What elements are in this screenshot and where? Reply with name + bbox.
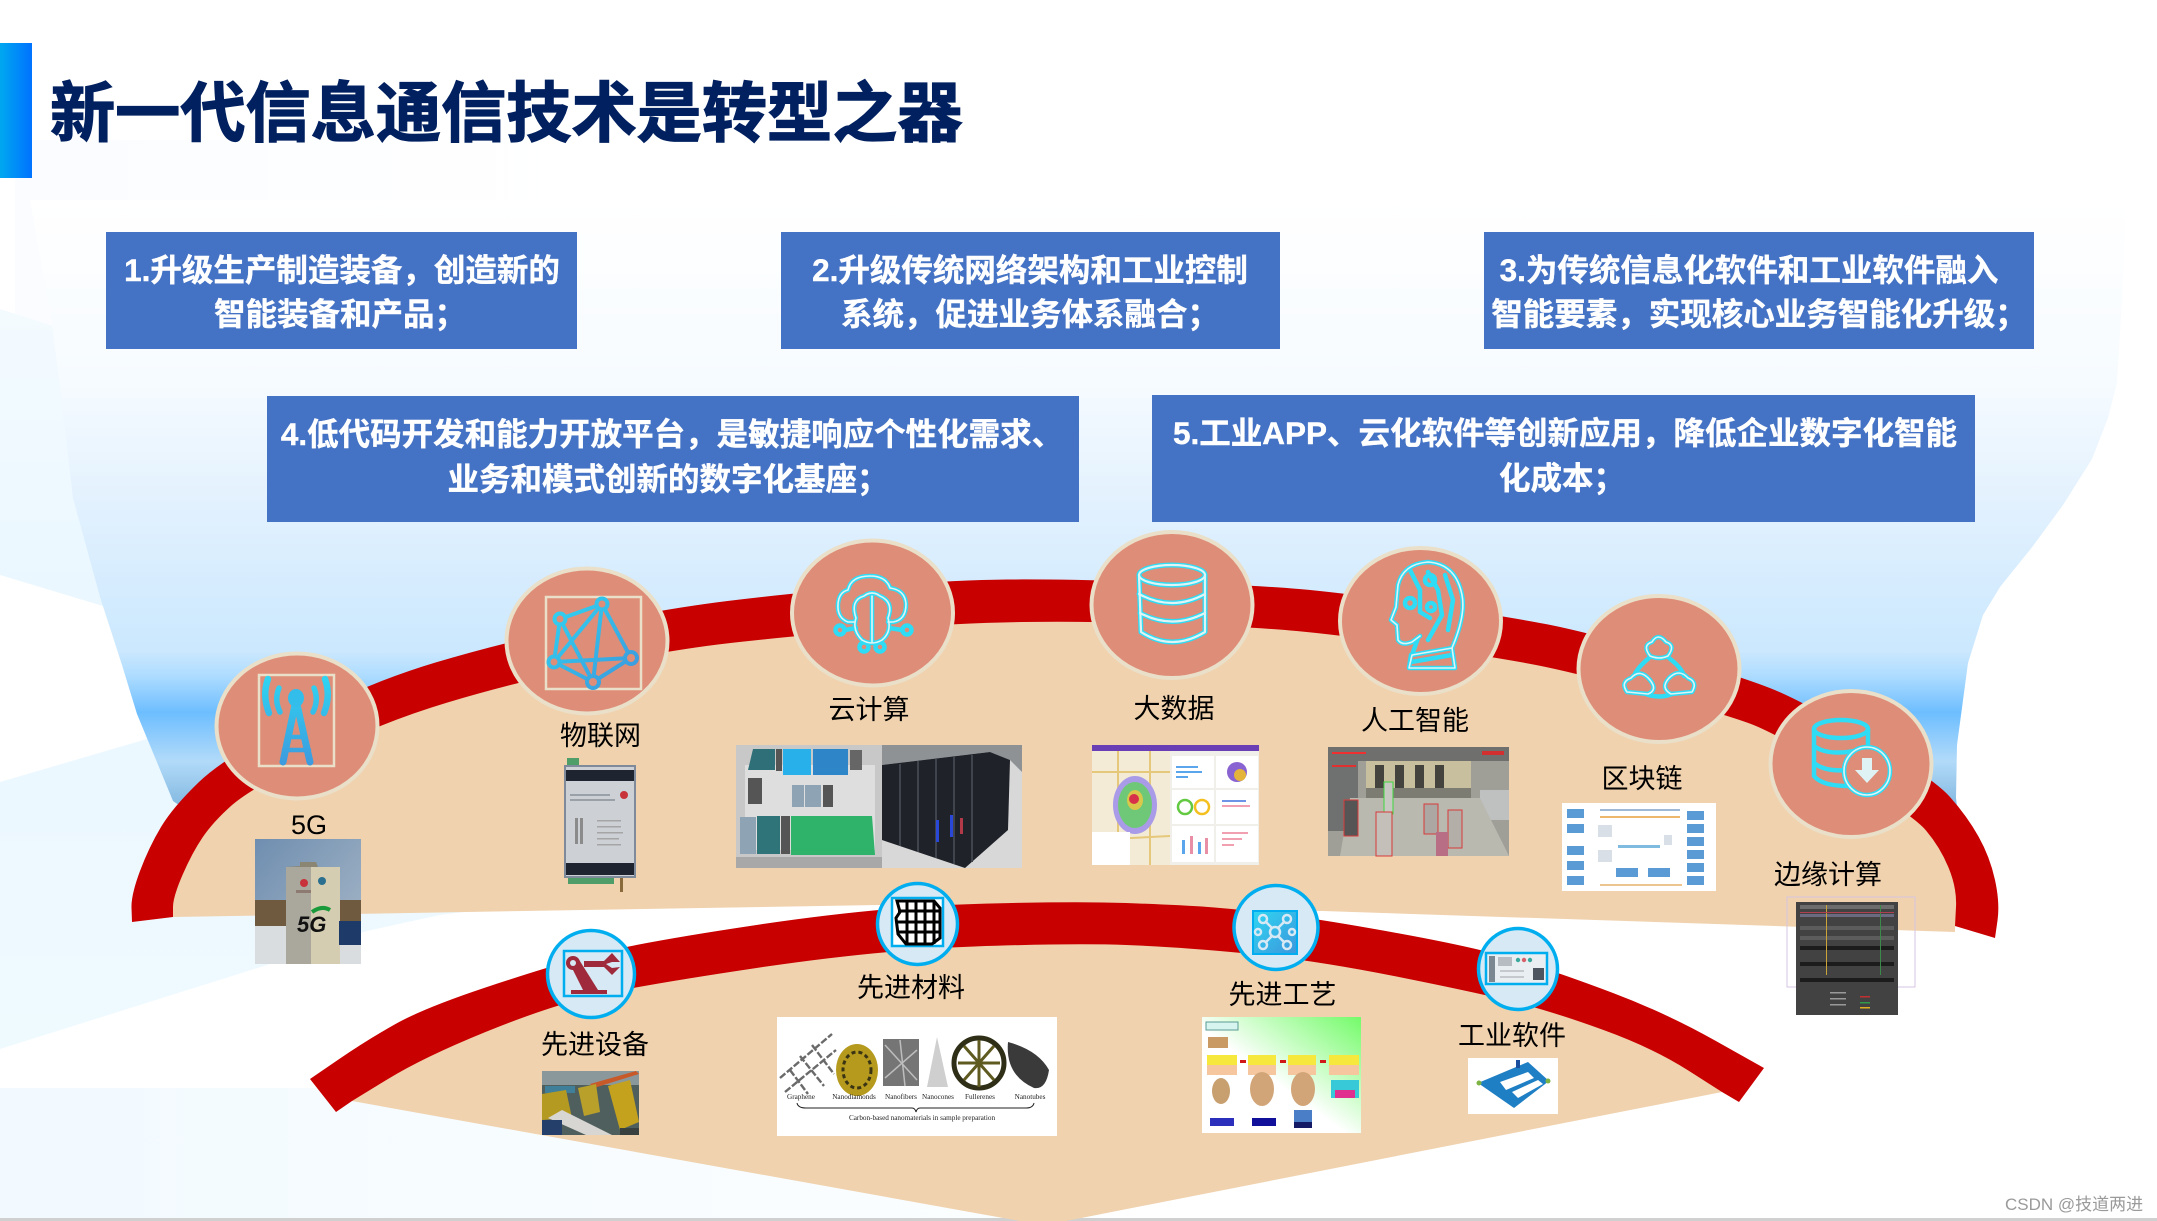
image: IC manufacturing process — [1202, 1017, 1361, 1133]
panel: point 2: 2.升级传统网络架构和工业控制 — [812, 252, 1248, 288]
image: industrial software model — [1468, 1058, 1558, 1114]
panel: point 2: 系统，促进业务体系融合； — [841, 296, 1219, 332]
label: edge computing: 边缘计算 — [1774, 860, 1882, 890]
icon: advanced materials node — [878, 884, 958, 964]
image: carbon nanomaterials: Nanodiamonds — [832, 1093, 876, 1101]
label: advanced materials: 先进材料 — [857, 973, 965, 1003]
label: advanced process: 先进工艺 — [1228, 980, 1336, 1010]
icon: blockchain node — [1578, 596, 1740, 742]
icon: advanced equipment node — [548, 930, 634, 1018]
image: 5G tower photo: 5G — [297, 912, 326, 937]
label: big data: 大数据 — [1134, 694, 1214, 724]
title accent bar — [0, 43, 32, 178]
panel: point 3: 3.为传统信息化软件和工业软件融入 — [1500, 252, 1998, 288]
panel: point 4: 4.低代码开发和能力开放平台，是敏捷响应个性化需求、 — [281, 416, 1063, 452]
image: factory robots photo — [542, 1071, 639, 1135]
label: blockchain: 区块链 — [1602, 764, 1682, 794]
panel: point 1 — [106, 232, 577, 349]
image: edge computing rack — [1787, 897, 1915, 1015]
image: big data dashboard — [1092, 745, 1259, 865]
image: 5G tower photo — [255, 839, 361, 964]
icon: advanced process node — [1234, 886, 1318, 970]
icon: 5G node — [216, 654, 378, 798]
label: industrial software: 工业软件 — [1458, 1021, 1566, 1051]
panel: point 3: 智能要素，实现核心业务智能化升级； — [1491, 296, 2027, 332]
image: carbon nanomaterials: Nanocones — [922, 1093, 954, 1101]
panel: point 1: 1.升级生产制造装备，创造新的 — [124, 252, 560, 288]
panel: point 4: 业务和模式创新的数字化基座； — [447, 461, 889, 497]
icon: big data node — [1092, 532, 1252, 678]
image: carbon nanomaterials: Nanofibers — [885, 1093, 917, 1101]
panel: point 3 — [1484, 232, 2034, 349]
panel: point 2 — [781, 232, 1280, 349]
panel: point 5: 化成本； — [1499, 460, 1625, 496]
icon: edge computing node — [1770, 691, 1932, 837]
image: carbon nanomaterials: Fullerenes — [965, 1093, 995, 1101]
image: carbon nanomaterials: Carbon-based nanomaterials in sample preparation — [849, 1114, 995, 1122]
image: carbon nanomaterials: Nanotubes — [1015, 1093, 1046, 1101]
image: blockchain diagram — [1562, 803, 1716, 891]
label: cloud computing: 云计算 — [828, 695, 910, 725]
icon: industrial software node — [1478, 928, 1558, 1010]
label: IoT: 物联网 — [560, 721, 641, 751]
image: cloud data centre — [736, 745, 1022, 868]
panel: point 5 — [1152, 395, 1975, 522]
upper arc: new ICT layer — [131, 579, 1998, 938]
icon: artificial intelligence node — [1340, 548, 1501, 694]
label: advanced equipment: 先进设备 — [541, 1030, 649, 1060]
panel: point 4 — [267, 396, 1079, 522]
label: artificial intelligence: 人工智能 — [1361, 706, 1469, 736]
lower arc: industrial foundation layer — [310, 902, 1764, 1221]
panel: point 5: 5.工业APP、云化软件等创新应用，降低企业数字化智能 — [1173, 415, 1957, 451]
image: IoT gateway device — [564, 758, 636, 892]
icon: cloud computing node — [792, 540, 953, 686]
image: carbon nanomaterials: Graphene — [787, 1093, 815, 1101]
image: AI camera view — [1328, 747, 1509, 856]
watermark: CSDN @技道两进 — [2005, 1195, 2143, 1214]
icon: internet of things node — [506, 568, 668, 714]
image: carbon nanomaterials — [777, 1017, 1057, 1136]
title: 新一代信息通信技术是转型之器 — [50, 77, 963, 150]
panel: point 1: 智能装备和产品； — [214, 296, 466, 332]
label: 5G: 5G — [291, 810, 327, 840]
